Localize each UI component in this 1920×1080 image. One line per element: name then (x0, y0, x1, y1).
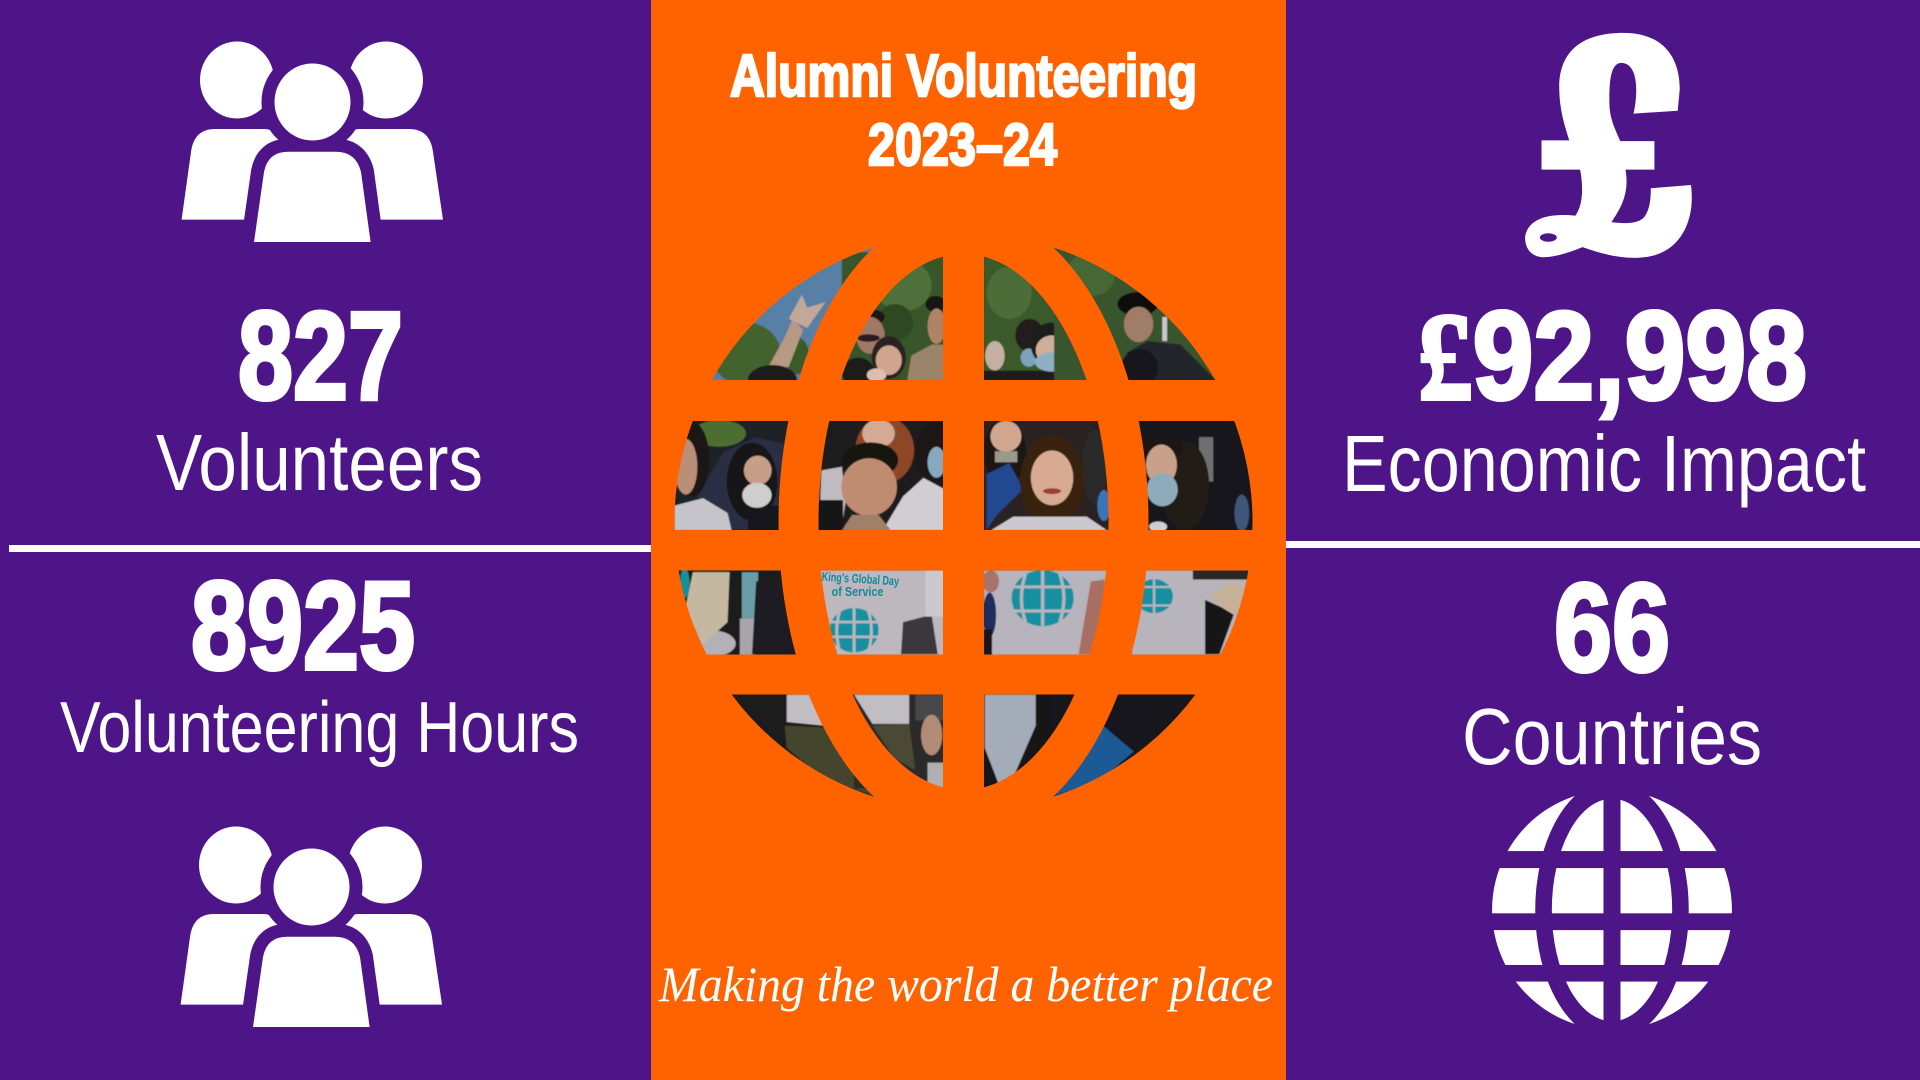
photo collage of volunteers (674, 247, 1252, 797)
icon: globe (1488, 780, 1736, 1040)
row 4 (732, 692, 879, 800)
panel: volunteers (156, 42, 483, 507)
photo collage of volunteers: King's Global Day (821, 569, 900, 588)
panel: volunteering hours (60, 557, 579, 1027)
globe meridians and parallels (664, 208, 1264, 836)
label: volunteering hours: Volunteering Hours (60, 688, 579, 768)
panel: countries (1462, 559, 1762, 1040)
tagline: Making the world a better place (658, 956, 1273, 1012)
stat: economic value: £92,998 (1418, 287, 1807, 427)
stat: 66: 66 (1554, 559, 1670, 698)
icon: pound sign (1525, 33, 1692, 258)
row 3 (679, 570, 797, 655)
photo collage of volunteers: of Service (832, 585, 883, 599)
label: countries: Countries (1462, 692, 1762, 781)
title: Alumni Volunteering (730, 43, 1197, 109)
label: volunteers: Volunteers (156, 418, 483, 507)
photo globe (674, 247, 1252, 797)
icon: people group (182, 42, 443, 242)
panel: centre orange (650, 0, 1290, 1080)
panel: economic impact (1342, 33, 1866, 508)
divider: right (1286, 541, 1920, 548)
row 1 (712, 247, 874, 380)
row 2 (675, 421, 788, 504)
title (730, 43, 1197, 178)
divider: left (9, 545, 651, 552)
stat: 827: 827 (238, 287, 403, 426)
icon: people group (181, 826, 442, 1027)
stat: 8925: 8925 (191, 557, 415, 696)
title: 2023–24 (868, 112, 1057, 178)
